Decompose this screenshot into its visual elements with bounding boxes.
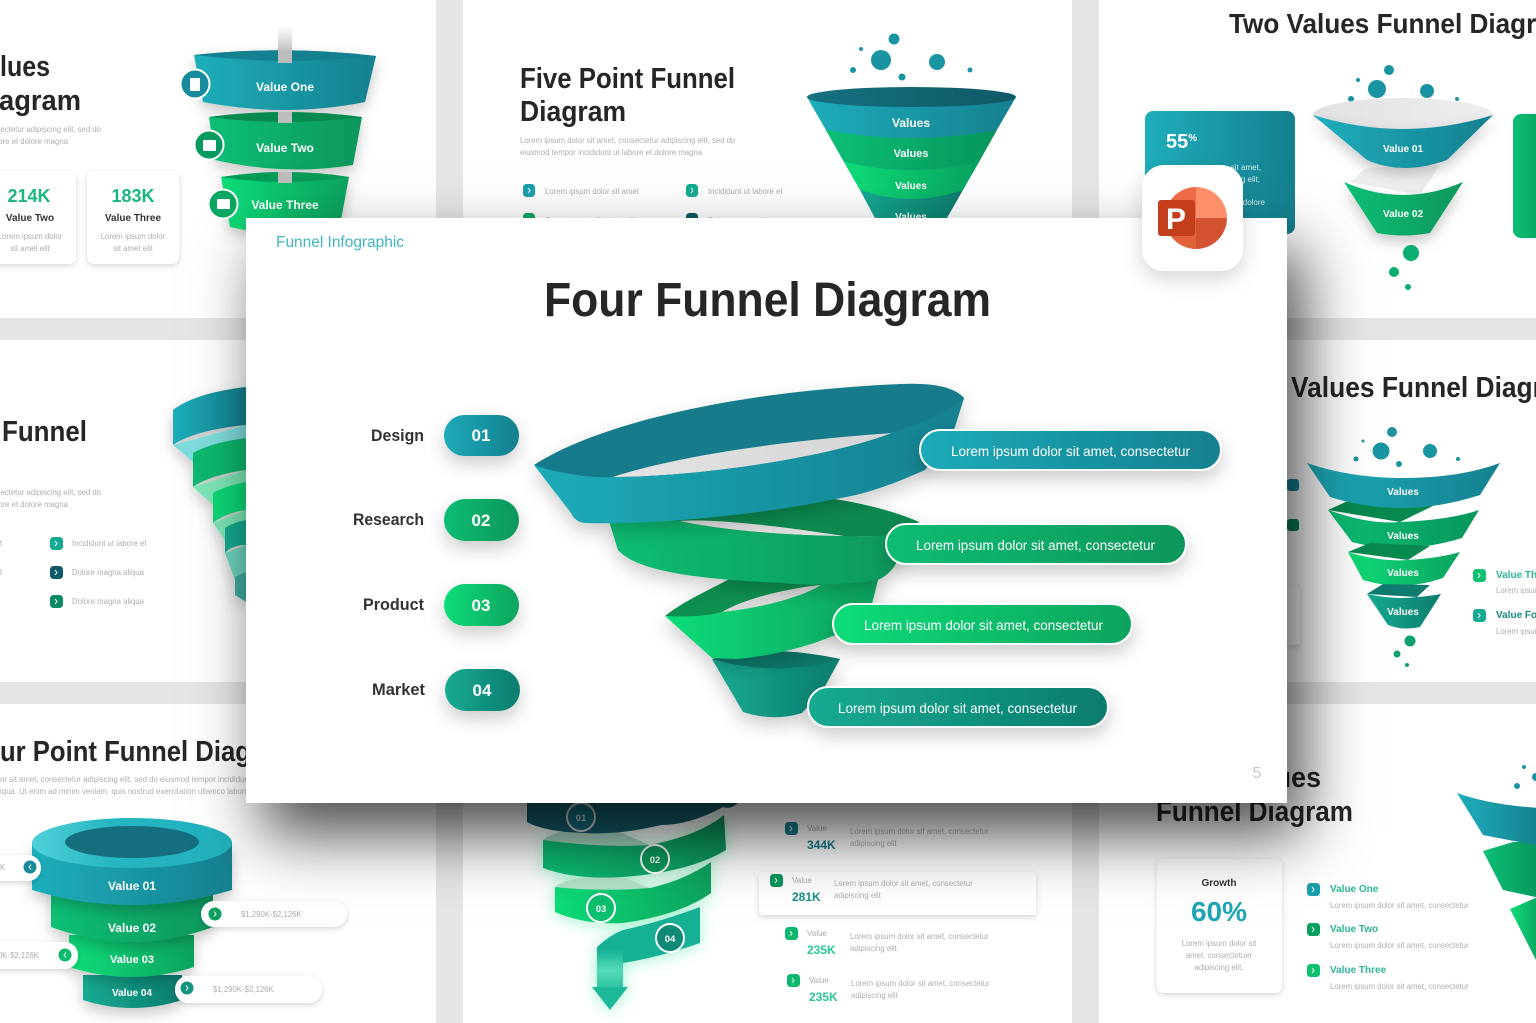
heading: four point funnel: ur Point Funnel Diagram bbox=[0, 736, 298, 768]
bullet list: t bbox=[0, 568, 3, 577]
value list: Lorem ipsum dolor sit amet, consectetur bbox=[1330, 982, 1469, 991]
growth card: Growth bbox=[1202, 878, 1236, 889]
icon: PowerPoint app: P bbox=[1166, 203, 1186, 236]
stat card 183K: Value Three bbox=[105, 213, 162, 224]
card 55 percent: % bbox=[1188, 133, 1197, 144]
funnel with layered values: Values bbox=[895, 181, 927, 192]
growth card bbox=[1157, 859, 1282, 993]
heading: three values bbox=[0, 51, 81, 117]
value rows: adipiscing elit bbox=[851, 991, 899, 1000]
funnel two values: Value 02 bbox=[1383, 209, 1423, 220]
slide: two values funnel bbox=[1145, 8, 1536, 290]
tiered funnel: Value 04 bbox=[112, 988, 152, 999]
value rows: 281K bbox=[792, 890, 821, 904]
value rows: Lorem ipsum dolor sit amet, consectetur bbox=[851, 979, 990, 988]
heading: funnel: Funnel bbox=[2, 416, 87, 448]
stat card 183K: sit amet elit bbox=[113, 244, 154, 253]
description text: iqua. Ut enim ad minim veniam, quis nostrud exercitation ullamco laboris nisi bbox=[0, 787, 264, 796]
stat card 214K: sit amet elit bbox=[10, 244, 51, 253]
label and pill: market 04 bbox=[372, 669, 520, 711]
card 55 percent: g elit, bbox=[1241, 175, 1260, 184]
bullet list: Incididunt ut labore et bbox=[708, 187, 783, 196]
callout 1 bbox=[920, 430, 1221, 470]
value rows: adipiscing elit bbox=[834, 891, 882, 900]
funnel ring 3 bbox=[665, 572, 880, 659]
card 55 percent: sit amet, bbox=[1231, 163, 1261, 172]
value list: Value Three bbox=[1330, 965, 1387, 976]
callout pills bbox=[808, 430, 1221, 727]
funnel with layered values: Values bbox=[895, 212, 927, 223]
central slide card bbox=[246, 218, 1287, 803]
callout 2: Lorem ipsum dolor sit amet, consectetur bbox=[916, 537, 1155, 553]
value list bbox=[1473, 569, 1536, 636]
label and pill: design 01: Design bbox=[371, 426, 424, 445]
heading: values funnel diagram: Values bbox=[1236, 762, 1321, 794]
tiered funnel: Value 03 bbox=[110, 954, 154, 966]
spiral funnel bbox=[527, 803, 738, 1010]
stat card 183K: Lorem ipsum dolor bbox=[101, 232, 166, 241]
green card bbox=[1513, 114, 1536, 238]
bullet list: Dolore magna aliqua bbox=[72, 568, 145, 577]
range pills: $1,290K-$2,126K bbox=[213, 985, 274, 994]
slide: spiral funnel bottom middle bbox=[527, 803, 1036, 1010]
value rows: Value bbox=[809, 976, 829, 985]
icon: PowerPoint app bbox=[1142, 165, 1243, 271]
bullet list: Incididunt ut labore et bbox=[72, 539, 147, 548]
value rows: Value bbox=[792, 876, 812, 885]
funnel four bands: Values bbox=[1387, 487, 1419, 498]
label and pill: design 01: 01 bbox=[472, 426, 490, 445]
funnel two values: Value 01 bbox=[1383, 144, 1423, 155]
callout 3 bbox=[833, 604, 1132, 644]
bullet list bbox=[0, 537, 147, 608]
funnel with three stacked values: Value Three bbox=[251, 198, 319, 212]
spiral funnel: 03 bbox=[596, 904, 606, 915]
heading: values funnel diagram: Funnel Diagram bbox=[1156, 796, 1353, 828]
slide: funnel stacked layers mid left bbox=[0, 387, 246, 608]
title: Four Funnel Diagram: Four Funnel Diagram bbox=[544, 274, 991, 327]
slide: three values funnel top left bbox=[0, 25, 376, 264]
value rows: 235K bbox=[809, 990, 838, 1004]
label and pill: research 02: Research bbox=[353, 510, 424, 529]
heading: three values: agram bbox=[0, 85, 81, 117]
value rows: adipiscing elit bbox=[850, 839, 898, 848]
value rows bbox=[759, 822, 1036, 1004]
partial funnel bbox=[1457, 765, 1536, 960]
value list bbox=[1307, 883, 1469, 991]
value rows: 235K bbox=[807, 943, 836, 957]
spiral funnel: 01 bbox=[576, 813, 587, 824]
card 55 percent: dolore bbox=[1243, 198, 1266, 207]
growth card: Lorem ipsum dolor sit bbox=[1182, 939, 1257, 948]
page number: 5 bbox=[1253, 765, 1262, 782]
growth card: adipiscing elit. bbox=[1195, 963, 1243, 972]
bullet list: Consectetur adipiscing elit bbox=[545, 216, 637, 225]
value list: Lorem ipsum dolor sit amet, consectetur bbox=[1330, 941, 1469, 950]
card 55 percent bbox=[1145, 111, 1295, 234]
card 55 percent: 55 bbox=[1166, 131, 1188, 153]
bubbles bbox=[1354, 427, 1460, 467]
range pills bbox=[0, 855, 347, 1003]
stat card 214K: 214K bbox=[7, 186, 51, 206]
slide: four point funnel bottom left bbox=[0, 736, 347, 1008]
callout 4: Lorem ipsum dolor sit amet, consectetur bbox=[838, 700, 1077, 716]
heading: five point funnel: Diagram bbox=[520, 96, 626, 128]
growth card: 60% bbox=[1191, 896, 1247, 927]
bubbles bbox=[1348, 65, 1459, 108]
funnel with layered values bbox=[807, 87, 1016, 265]
description text: ectetur adipiscing elit, sed do bbox=[0, 125, 102, 134]
funnel four bands: Values bbox=[1387, 568, 1419, 579]
funnel with three stacked values bbox=[180, 25, 376, 233]
stat card 214K: Value Two bbox=[6, 213, 54, 224]
value rows: 344K bbox=[807, 838, 836, 852]
callout 2 bbox=[886, 524, 1186, 564]
value list: Value Two bbox=[1330, 924, 1378, 935]
funnel with layered values: Values bbox=[894, 148, 928, 160]
value rows: Lorem ipsum dolor sit amet, consectetur bbox=[850, 827, 989, 836]
range pills: $1,290K-$2,126K bbox=[241, 910, 302, 919]
label and pill: research 02 bbox=[353, 499, 519, 541]
heading: values funnel diagram bbox=[1156, 762, 1353, 828]
growth card: amet, consectetuer bbox=[1186, 951, 1253, 960]
funnel ring 4 bbox=[712, 651, 840, 717]
heading: five point funnel bbox=[520, 63, 735, 128]
callout 3: Lorem ipsum dolor sit amet, consectetur bbox=[864, 617, 1103, 633]
funnel two values bbox=[1313, 98, 1493, 236]
tiered funnel: Value 02 bbox=[108, 921, 156, 935]
bullet list: Dolore magna aliqua bbox=[72, 597, 145, 606]
bubbles bbox=[850, 34, 972, 80]
row labels with number pills bbox=[353, 415, 520, 711]
description text: ectetur adipiscing elit, sed do bbox=[0, 488, 102, 497]
description text bbox=[520, 136, 736, 157]
stat card 183K: 183K bbox=[111, 186, 155, 206]
description text bbox=[0, 488, 102, 509]
value list: Value One bbox=[1330, 884, 1379, 895]
value rows: adipiscing elit bbox=[850, 944, 898, 953]
value rows: Value bbox=[807, 929, 827, 938]
value rows: Lorem ipsum dolor sit amet, consectetur bbox=[850, 932, 989, 941]
value list: Lorem ipsum dolor sit amet, consectetur bbox=[1330, 901, 1469, 910]
funnel ring 1 bbox=[534, 384, 964, 523]
funnel four bands: Values bbox=[1387, 531, 1419, 542]
heading: three values: lues bbox=[0, 51, 50, 83]
bullet list bbox=[523, 184, 783, 226]
lower bubbles bbox=[1394, 636, 1416, 667]
lower bubbles bbox=[1389, 245, 1419, 290]
range pills: K bbox=[0, 863, 6, 872]
bullet list: Dolore magna aliqua bbox=[708, 216, 781, 225]
description text: ore et dolore magna bbox=[0, 500, 69, 509]
funnel with layered values: Values bbox=[892, 116, 930, 130]
bullet list: t bbox=[0, 539, 3, 548]
spiral funnel: 02 bbox=[650, 855, 660, 866]
description text bbox=[0, 775, 264, 796]
stat card 214K bbox=[0, 171, 76, 264]
left bullets and ghost card bbox=[1287, 479, 1300, 645]
funnel with three stacked values: Value Two bbox=[256, 141, 314, 155]
label and pill: market 04: 04 bbox=[473, 681, 492, 700]
callout 1: Lorem ipsum dolor sit amet, consectetur bbox=[951, 443, 1190, 459]
funnel four bands: Values bbox=[1387, 607, 1419, 618]
heading: five point funnel: Five Point Funnel bbox=[520, 63, 735, 95]
description text bbox=[0, 125, 102, 146]
funnel with three stacked values: Value One bbox=[256, 80, 314, 94]
slide: five point funnel bbox=[520, 34, 1016, 265]
card 55 percent: r bbox=[1240, 187, 1243, 196]
description text: Lorem ipsum dolor sit amet, consectetur adipiscing elit, sed do bbox=[520, 136, 736, 145]
value rows: Value bbox=[807, 824, 827, 833]
slide: growth funnel bottom right bbox=[1156, 762, 1536, 993]
main spiral funnel bbox=[534, 384, 964, 717]
label and pill: product 03 bbox=[363, 584, 519, 626]
value rows: Lorem ipsum dolor sit amet, consectetur bbox=[834, 879, 973, 888]
subtitle: Funnel Infographic: Funnel Infographic bbox=[276, 234, 404, 251]
label and pill: research 02: 02 bbox=[472, 511, 490, 530]
stacked funnel bbox=[173, 387, 246, 602]
slide: values funnel mid right bbox=[1287, 372, 1536, 667]
tiered funnel: Value 01 bbox=[108, 879, 156, 893]
label and pill: design 01 bbox=[371, 415, 519, 456]
funnel ring 2 bbox=[608, 497, 919, 585]
label and pill: product 03: 03 bbox=[472, 596, 490, 615]
label and pill: market 04: Market bbox=[372, 680, 425, 699]
description text: ore et dolore magna bbox=[0, 137, 69, 146]
funnel four bands bbox=[1307, 463, 1500, 629]
spiral funnel: 04 bbox=[665, 934, 676, 945]
tiered funnel bbox=[32, 818, 232, 1008]
description text: or sit amet, consectetur adipiscing elit, sed do eiusmod tempor incididunt ut bbox=[0, 775, 260, 784]
description text: eiusmod tempor incididunt ut labore et dolore magna bbox=[520, 148, 703, 157]
callout 4 bbox=[808, 687, 1108, 727]
bullet list: Lorem ipsum dolor sit amet bbox=[545, 187, 640, 196]
label and pill: product 03: Product bbox=[363, 595, 424, 614]
stat card 183K bbox=[87, 171, 179, 264]
